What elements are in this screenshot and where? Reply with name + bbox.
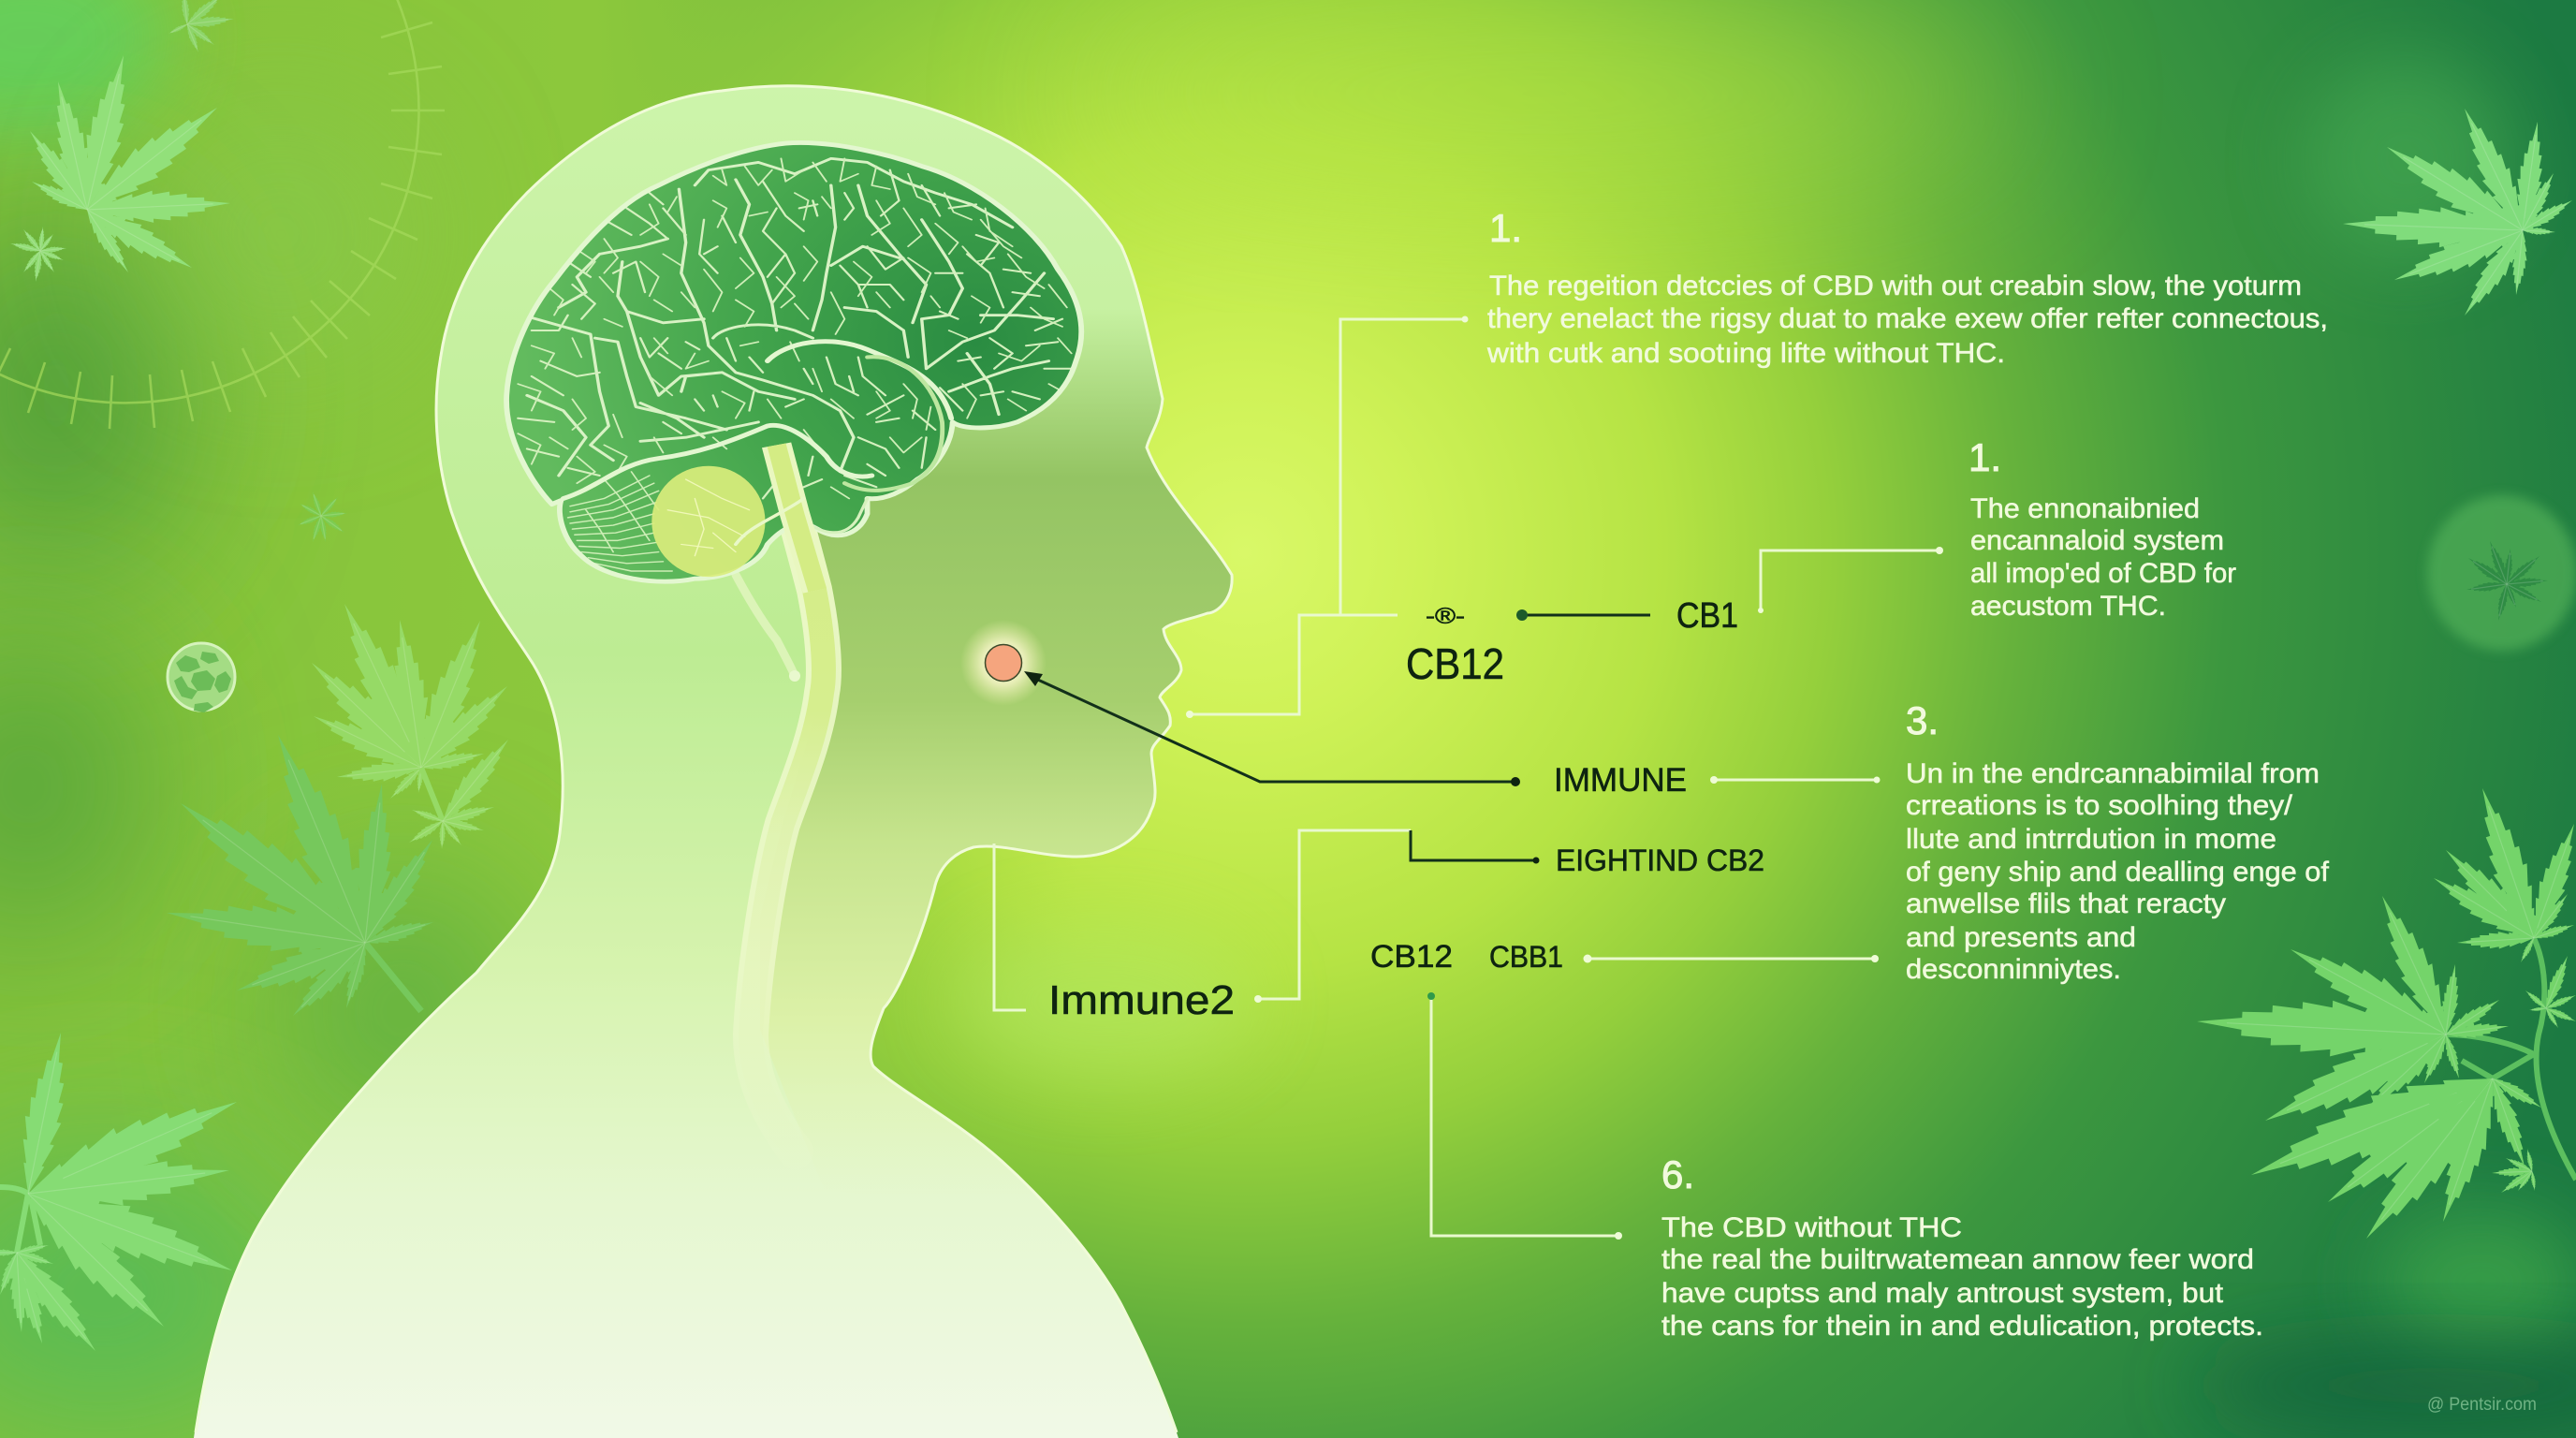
text block 3: of geny ship and dealling enge of <box>1906 857 2330 888</box>
icon: small star leaf left <box>9 227 66 283</box>
icon: bottom-left leaf <box>0 1029 247 1359</box>
text block 1: 1. <box>1489 206 1522 250</box>
text block 3: anwellse flils that reracty <box>1906 888 2226 919</box>
text block 4: have cuptss and maly antroust system, but <box>1661 1278 2224 1309</box>
connector: Immune2 to Eightind <box>1254 830 1539 1003</box>
brain body <box>506 142 1081 581</box>
connector: neck bracket <box>994 844 1026 1010</box>
text block 3: and presents and <box>1906 922 2136 953</box>
icon: leaf in circle <box>2427 495 2576 651</box>
text block 2: aecustom THC. <box>1970 591 2166 622</box>
brain outline <box>506 142 1081 581</box>
connector: CB12 to text 4 <box>1427 992 1622 1240</box>
decorative tick arc <box>0 0 445 429</box>
text block 4: 6. <box>1661 1152 1694 1196</box>
text block 4: the cans for thein in and edulication, protects. <box>1661 1311 2263 1342</box>
text block 3: crreations is to soolhing they/ <box>1906 790 2293 821</box>
text block 2: all imop'ed of CBD for <box>1970 558 2236 589</box>
label: EIGHTIND CB2: EIGHTIND CB2 <box>1556 844 1764 877</box>
label: CB12: CB12 <box>1406 639 1504 688</box>
label: Immune2: Immune2 <box>1048 977 1235 1023</box>
brainstem lobe <box>804 498 868 533</box>
brain vein network <box>518 158 1076 571</box>
yellow pineal sphere <box>651 466 765 577</box>
label: CB12 small: CB12 <box>1370 939 1453 975</box>
text block 1: thery enelact the rigsy duat to make exew offer refter connectous, <box>1487 303 2328 334</box>
text block 2 <box>1969 435 2236 622</box>
text block 4: the real the builtrwatemean annow feer word <box>1661 1244 2254 1275</box>
icon: mid-left cannabis leaf <box>300 595 517 802</box>
connector: CB1 to text 2 <box>1758 547 1943 613</box>
connector: CBB1 to text 3 <box>1584 955 1879 962</box>
text block 3: desconninniytes. <box>1906 954 2121 985</box>
icon: top-right leaf <box>2342 102 2576 322</box>
spinal cord <box>736 448 824 1152</box>
label: IMMUNE: IMMUNE <box>1554 762 1687 799</box>
icon: top-left cannabis leaf <box>22 51 231 280</box>
target spot with glow <box>960 620 1046 706</box>
cord top in brain <box>777 445 817 590</box>
connector: dark CB1 lead <box>1516 609 1650 621</box>
text block 3: Un in the endrcannabimilal from <box>1906 758 2320 789</box>
text block 2: encannaloid system <box>1970 525 2224 556</box>
text block 1 <box>1486 206 2328 369</box>
label: CB1: CB1 <box>1676 596 1738 636</box>
label: circled symbol: -®- <box>1426 604 1465 629</box>
text block 4: The CBD without THC <box>1661 1212 1962 1243</box>
connector: immune to text 3 <box>1710 776 1880 784</box>
text block 3 <box>1906 698 2330 985</box>
icon: small leaf at top edge <box>168 0 235 53</box>
icon: bottom-right cannabis branch <box>2195 783 2576 1253</box>
head and body silhouette <box>140 75 1245 1438</box>
label: CBB1: CBB1 <box>1489 940 1563 974</box>
icon: lower-left large leaf <box>163 726 444 1024</box>
text block 1: with cutk and sootıing lifte without THC. <box>1486 338 2005 369</box>
text block 3: llute and intrrdution in mome <box>1906 824 2276 855</box>
icon: small star leaf centre left <box>297 491 347 543</box>
text block 2: 1. <box>1969 435 2001 479</box>
text block 1: The regeition detccies of CBD with out creabin slow, the yoturm <box>1489 271 2302 301</box>
watermark: @ Pentsir.com <box>2427 1395 2537 1415</box>
brain <box>506 142 1081 590</box>
icon: cell disc <box>168 643 235 712</box>
connector: text 1 to face <box>1186 316 1468 718</box>
text block 3: 3. <box>1906 698 1939 742</box>
brain temporal fold <box>564 342 951 498</box>
arrow: immune to target spot <box>1024 671 1520 786</box>
brain inner lobe arc <box>844 357 943 491</box>
text block 4 <box>1661 1152 2263 1342</box>
icon: small branch leaf <box>406 732 518 849</box>
text block 2: The ennonaibnied <box>1970 493 2200 524</box>
